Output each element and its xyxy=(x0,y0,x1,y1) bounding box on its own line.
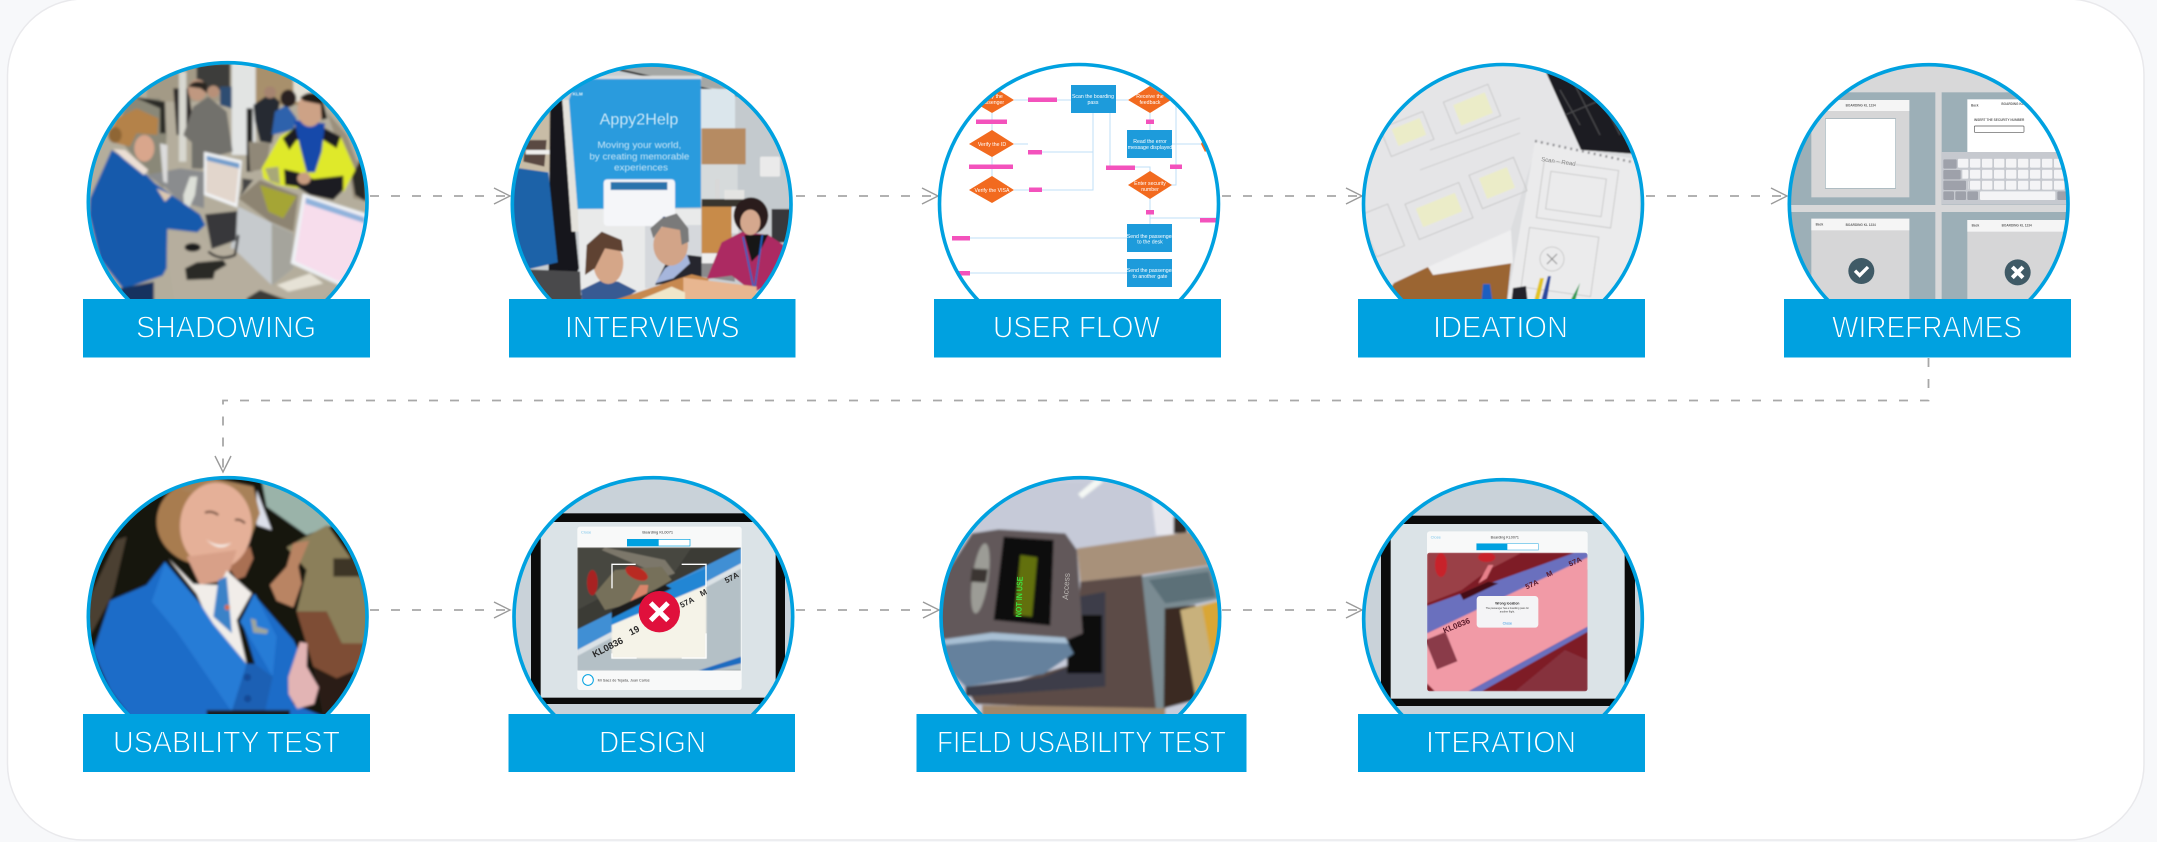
flow decisions xyxy=(969,86,1214,203)
label: interviews xyxy=(509,299,796,358)
photo: wireframe screens xyxy=(1788,62,2070,299)
wireframe captions: BOARDING KL 1234 xyxy=(2002,224,2032,228)
photo: user flow diagram xyxy=(938,62,1220,299)
label: shadowing xyxy=(83,299,370,358)
label: wireframes: WIREFRAMES xyxy=(1832,310,2022,344)
wireframe captions: BOARDING KL 1234 xyxy=(1846,104,1876,108)
photo: gate reader showing not in use xyxy=(939,476,1222,714)
dialog: wrong location: Close xyxy=(1503,622,1512,626)
flow captions: Receive the xyxy=(1136,94,1164,100)
step: design xyxy=(505,470,800,772)
passenger row: Mr Saez de Tejada, Juan Carlos xyxy=(598,678,650,682)
wireframe captions: Back xyxy=(1816,223,1823,227)
text: boarding pass: 57A xyxy=(1524,577,1540,591)
flow captions: Verify the xyxy=(981,94,1003,100)
dialog: wrong location xyxy=(1477,596,1538,628)
arrow: user flow to ideation xyxy=(1222,188,1362,204)
step: field usability test xyxy=(916,470,1246,772)
label: field usability test xyxy=(916,714,1246,772)
text: sketch note: Scan – Read xyxy=(1541,157,1576,168)
photo: airport check-in desk xyxy=(86,60,369,299)
text: boarding pass: M xyxy=(698,587,709,598)
app header: Boarding KL0071 xyxy=(642,529,674,534)
flow captions: number xyxy=(1141,187,1159,193)
text: reader display: NOT IN USE xyxy=(1013,576,1025,617)
arrow: wireframes down and back to usability test xyxy=(215,358,1928,472)
photo: tablet scanning boarding pass with error xyxy=(512,476,794,714)
arrow: interviews to user flow xyxy=(796,188,938,204)
text: boarding pass: KL0836 xyxy=(591,635,625,659)
flow captions: passenger xyxy=(980,100,1004,106)
arrow: usability test to design xyxy=(370,602,510,618)
text: boarding pass xyxy=(591,570,740,659)
label: wireframes xyxy=(1784,299,2071,358)
photo: tablet with wrong-location alert xyxy=(1362,478,1644,714)
flow connector tags xyxy=(952,98,1217,276)
label: interviews: INTERVIEWS xyxy=(565,310,740,344)
app header: Boarding KL0071 xyxy=(1491,536,1519,540)
icon: success check xyxy=(1848,258,1874,284)
label: user flow xyxy=(934,299,1221,358)
text: boarding pass: 19 xyxy=(627,624,641,637)
step: shadowing xyxy=(80,55,375,358)
label: usability test xyxy=(83,714,370,772)
wireframe captions: INSERT THE SECURITY NUMBER xyxy=(1974,118,2025,122)
flow captions: Send the passenger xyxy=(1127,234,1173,240)
flow captions: Read the error xyxy=(1133,139,1167,145)
text: banner copy: Appy2Help xyxy=(600,111,678,128)
flow captions: Verify the ID xyxy=(978,142,1006,148)
step: usability test xyxy=(80,470,375,772)
label: ideation xyxy=(1358,299,1645,358)
text: device brand: Access xyxy=(1060,573,1072,600)
step: wireframes xyxy=(1780,60,2080,357)
label: iteration xyxy=(1358,714,1645,772)
icon: red error cross xyxy=(639,591,680,632)
dialog: wrong location: Wrong location xyxy=(1495,601,1519,605)
wireframe captions xyxy=(1816,102,2032,228)
label: design: DESIGN xyxy=(599,724,706,760)
flow captions: feedback xyxy=(1139,100,1161,106)
wireframe captions: BOARDING KL 1234 xyxy=(2001,102,2032,106)
app header: Close xyxy=(1431,535,1442,540)
photo: paper sketches, keyboard and pencils xyxy=(1362,62,1644,299)
label: user flow: USER FLOW xyxy=(993,310,1161,344)
label: design xyxy=(508,714,795,772)
text: boarding pass xyxy=(1442,555,1584,635)
label: iteration: ITERATION xyxy=(1426,724,1576,760)
arrow: shadowing to interviews xyxy=(370,188,510,204)
text: boarding pass: KL0836 xyxy=(1442,616,1472,635)
label: ideation: IDEATION xyxy=(1433,310,1568,344)
passenger row xyxy=(583,675,650,685)
text: boarding pass: 57A xyxy=(1567,555,1584,568)
arrow: design to field usability test xyxy=(796,602,939,618)
text: banner copy xyxy=(573,91,689,173)
wireframe captions: Back xyxy=(1972,224,1979,228)
arrow: ideation to wireframes xyxy=(1646,188,1787,204)
text: banner copy: by creating memorable xyxy=(589,151,689,161)
label: usability test: USABILITY TEST xyxy=(113,724,340,760)
step: ideation xyxy=(1355,55,1655,358)
step: interviews xyxy=(505,55,802,358)
step: iteration xyxy=(1355,470,1650,772)
label: shadowing: SHADOWING xyxy=(136,310,316,344)
text: boarding pass: M xyxy=(1545,568,1554,579)
wireframe captions: BOARDING KL 1234 xyxy=(1846,223,1876,227)
flow captions: Scan the boarding xyxy=(1072,94,1114,100)
text: boarding pass: 57A xyxy=(723,570,740,585)
flow captions: Enter security xyxy=(1134,181,1166,187)
dialog: wrong location: The passenger has a boarding pass for xyxy=(1486,607,1529,610)
text: boarding pass: 57A xyxy=(678,595,696,610)
icon: failure cross xyxy=(2005,259,2031,285)
arrow: field usability test to iteration xyxy=(1222,602,1362,618)
text: banner copy: KLM xyxy=(573,91,583,96)
flow captions: to the desk xyxy=(1137,240,1163,246)
flow captions xyxy=(975,94,1173,280)
text: banner copy: experiences xyxy=(614,163,669,173)
label: field usability test: FIELD USABILITY TEST xyxy=(937,724,1226,760)
app header xyxy=(1431,535,1538,550)
flow captions: to another gate xyxy=(1133,274,1168,280)
dialog: wrong location: another flight. xyxy=(1500,611,1515,614)
wireframe captions: Back xyxy=(1971,104,1979,108)
flow captions: Send the passenger xyxy=(1127,268,1173,274)
app header: Close xyxy=(581,529,592,534)
flow captions: message displayed xyxy=(1128,145,1172,151)
photo: Appy2Help banner and interview participants xyxy=(510,63,793,299)
text: banner copy: Moving your world, xyxy=(597,140,681,150)
flow captions: Verify the VISA xyxy=(975,188,1010,194)
flow captions: pass xyxy=(1088,100,1099,106)
app header xyxy=(581,529,690,546)
flow boxes xyxy=(1071,85,1172,287)
step: user flow xyxy=(930,55,1230,358)
photo: smiling KLM employee with thumbs up xyxy=(86,476,369,714)
